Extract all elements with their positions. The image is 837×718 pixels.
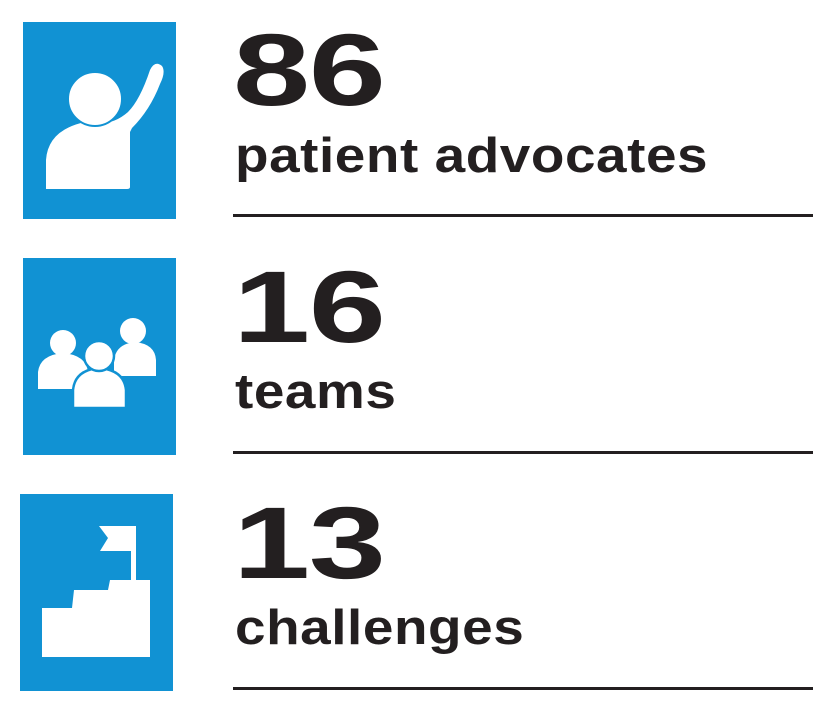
number 86: 86 — [233, 13, 385, 127]
icon: raised hand person — [23, 22, 176, 219]
label: teams — [235, 365, 396, 419]
icon: group of people — [23, 258, 176, 455]
icon: stairs with flag — [20, 494, 173, 691]
label: patient advocates — [235, 129, 708, 183]
label: challenges — [235, 601, 524, 655]
panel: patient advocates — [23, 13, 708, 219]
number 16: 16 — [233, 250, 385, 364]
panel: teams — [23, 250, 396, 455]
panel: challenges — [20, 486, 524, 691]
number 13: 13 — [233, 486, 385, 600]
